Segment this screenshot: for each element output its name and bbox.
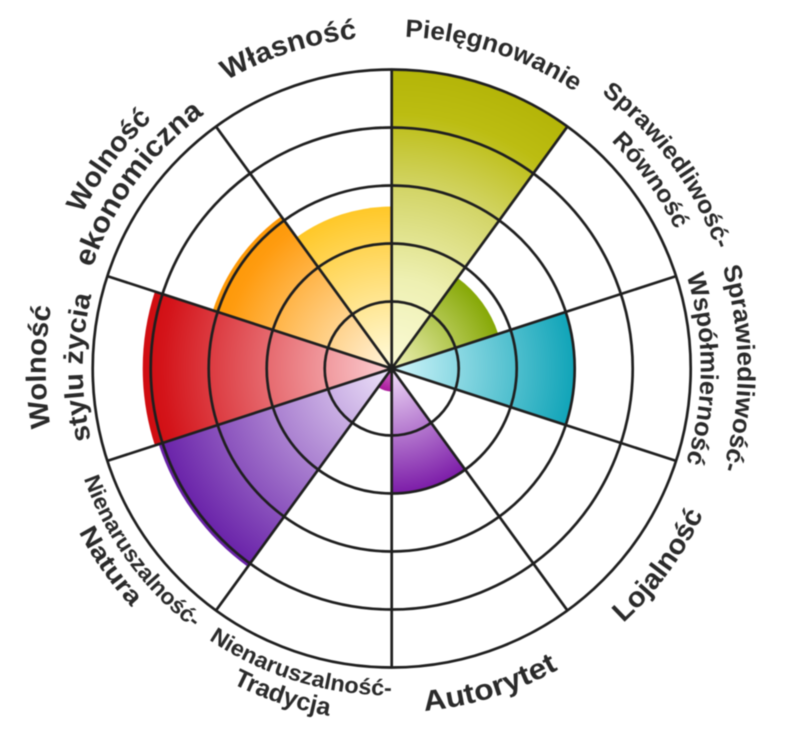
label: Nienaruszalność-Natura: Natura [79,524,140,608]
label: Wolność stylu życia: stylu życia [62,294,92,442]
label: Autorytet: Autorytet [424,654,558,712]
label: Sprawiedliwość-Równość: Sprawiedliwość- [603,82,730,248]
label: Pielęgnowanie: Pielęgnowanie [406,18,580,90]
sector: Sprawiedliwość-Współmierność [392,312,575,425]
sector: Wolność ekonomiczna [213,216,392,368]
sector: Pielęgnowanie [392,70,567,368]
label: Sprawiedliwość-Równość: Równość [612,130,691,228]
label: Nienaruszalność-Tradycja: Nienaruszalność- [210,626,392,696]
sector: Nienaruszalność-Tradycja [378,368,392,392]
sector: Nienaruszalność-Natura [159,368,392,567]
coloured sectors [143,70,575,567]
label: Wolność stylu życia [24,294,92,442]
label: Wolność ekonomiczna: ekonomiczna [78,104,205,266]
label: Sprawiedliwość-Współmierność [686,264,756,472]
label: Własność: Własność [217,18,356,78]
grid: concentric rings and spokes [93,70,691,668]
label: Sprawiedliwość-Współmierność: Współmierność [686,270,720,466]
sector: Autorytet [392,368,465,494]
label: Lojalność: Lojalność [610,507,702,622]
label: Wolność ekonomiczna: Wolność [64,106,150,210]
sector: Wolność stylu życia [143,292,392,445]
sector: Własność [296,206,392,368]
label: Sprawiedliwość-Współmierność: Sprawiedliwość- [722,264,756,472]
label: Wolność stylu życia: Wolność [24,305,52,430]
label: Nienaruszalność-Tradycja: Tradycja [237,668,330,718]
sector: Sprawiedliwość-Równość [392,278,498,368]
label: Nienaruszalność-Natura: Nienaruszalność- [84,474,198,625]
